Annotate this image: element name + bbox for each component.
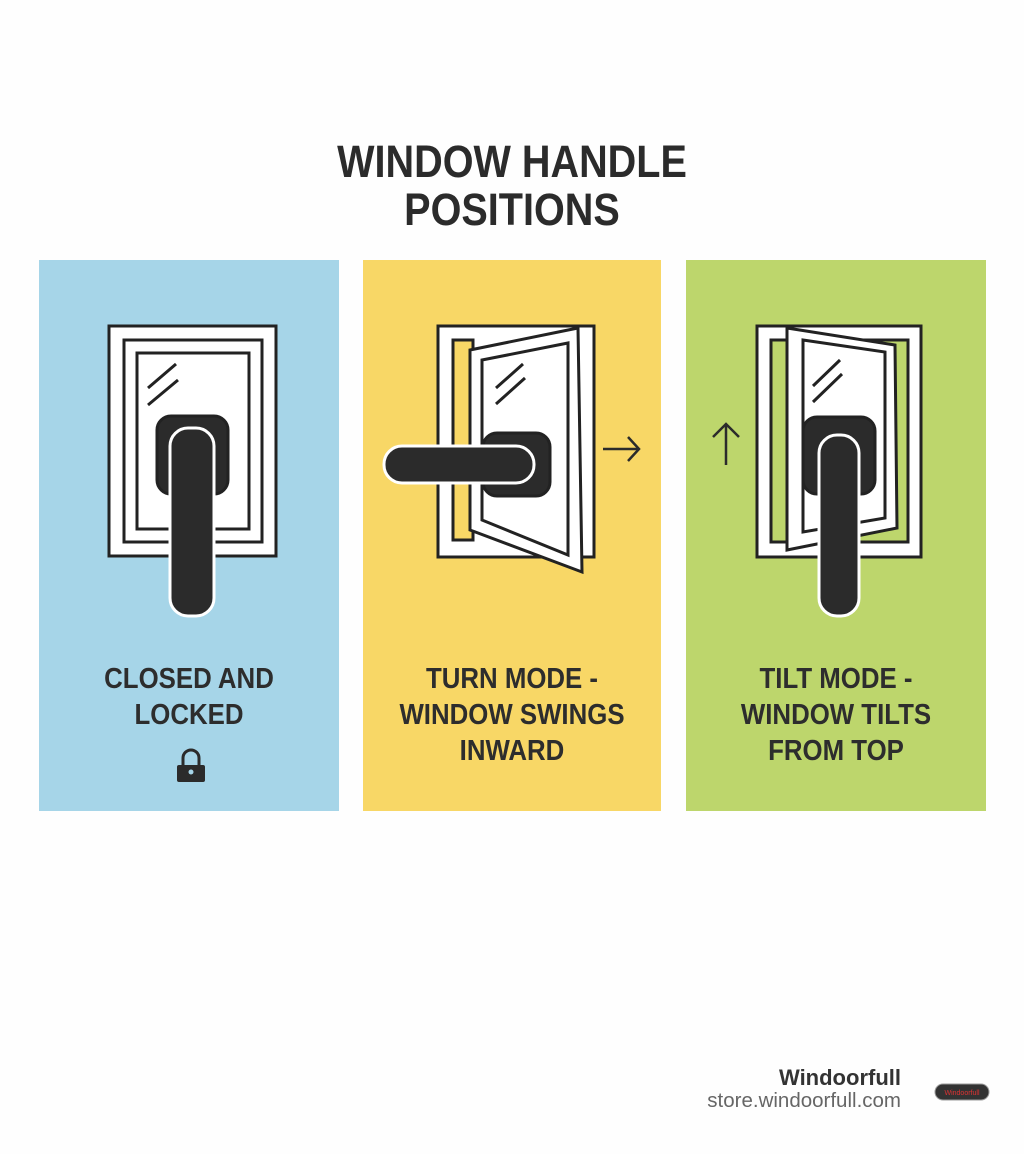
panel: closed and locked [39, 260, 339, 811]
label: turn mode: INWARD [460, 735, 564, 767]
label: turn mode: WINDOW SWINGS [399, 699, 625, 731]
label: tilt mode: TILT MODE - [760, 663, 912, 695]
label: closed and locked [104, 663, 274, 731]
title: WINDOW HANDLE [337, 136, 687, 187]
footer: brand: Windoorfull [779, 1065, 901, 1090]
label: turn mode: TURN MODE - [426, 663, 598, 695]
panel: tilt mode [686, 260, 986, 811]
panel: turn mode [363, 260, 661, 811]
title: POSITIONS [404, 184, 620, 235]
label: turn mode [399, 663, 625, 767]
label: tilt mode [740, 663, 931, 767]
logo badge [935, 1084, 989, 1100]
arrow: up [713, 424, 739, 465]
label: tilt mode: FROM TOP [768, 735, 904, 767]
logo badge: Windoorfull [944, 1090, 980, 1097]
footer: brand: store.windoorfull.com [707, 1089, 901, 1112]
label: closed and locked: CLOSED AND [104, 663, 274, 695]
arrow: right [603, 437, 639, 461]
icon: tilted window [757, 326, 921, 616]
icon: padlock [177, 750, 205, 782]
icon: closed window [109, 326, 276, 616]
title [337, 136, 687, 235]
icon: open window [384, 326, 594, 572]
label: closed and locked: LOCKED [135, 699, 243, 731]
footer: brand [707, 1065, 901, 1112]
label: tilt mode: WINDOW TILTS [741, 699, 931, 731]
